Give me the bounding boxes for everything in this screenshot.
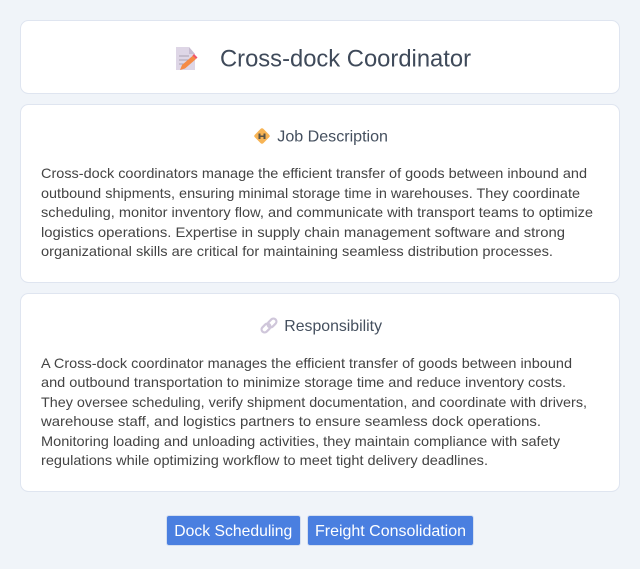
tag: dock scheduling bbox=[166, 516, 300, 546]
text block: responsibility bbox=[40, 355, 587, 468]
panel: job description bbox=[20, 104, 620, 282]
heading: job description: Job Description bbox=[277, 129, 388, 146]
text block: job description: outbound shipments, ensuring minimal storage time in warehouses. They coordinate bbox=[41, 185, 580, 201]
text block: responsibility: Monitoring loading and unloading activities, they maintain compliance with safety bbox=[41, 433, 560, 449]
text block: responsibility: and outbound transportation to minimize storage time and reduce inventory costs. bbox=[41, 374, 566, 390]
text block: job description: scheduling, monitor inventory flow, and communicate with transport teams to optimize bbox=[41, 204, 593, 220]
heading: responsibility: Responsibility bbox=[284, 318, 382, 335]
text block: job description: logistics operations. Expertise in supply chain management software and strong bbox=[41, 224, 565, 240]
tag: freight consolidation: Freight Consolidation bbox=[315, 523, 466, 540]
icon: document with pencil bbox=[176, 47, 198, 70]
icon: orange diamond sign bbox=[254, 128, 270, 144]
icon: chain link bbox=[260, 317, 278, 334]
text block: job description bbox=[41, 165, 593, 259]
panel: title card bbox=[20, 20, 620, 94]
tag: dock scheduling: Dock Scheduling bbox=[174, 523, 292, 540]
tag: freight consolidation bbox=[308, 516, 474, 546]
text block: job description: organizational skills are critical for maintaining seamless distribution processes. bbox=[41, 243, 553, 259]
title: Cross-dock Coordinator bbox=[220, 46, 471, 73]
text block: responsibility: A Cross-dock coordinator manages the efficient transfer of goods between inbound bbox=[41, 355, 572, 371]
text block: responsibility: They oversee scheduling, verify shipment documentation, and coordinate with drivers, bbox=[41, 394, 587, 410]
panel: responsibility bbox=[20, 294, 620, 492]
text block: job description: Cross-dock coordinators manage the efficient transfer of goods between inbound and bbox=[41, 165, 587, 181]
text block: responsibility: regulations while optimizing workflow to meet tight delivery deadlines. bbox=[41, 452, 488, 468]
text block: responsibility: warehouse staff, and logistics partners to ensure seamless dock operations. bbox=[40, 413, 541, 429]
